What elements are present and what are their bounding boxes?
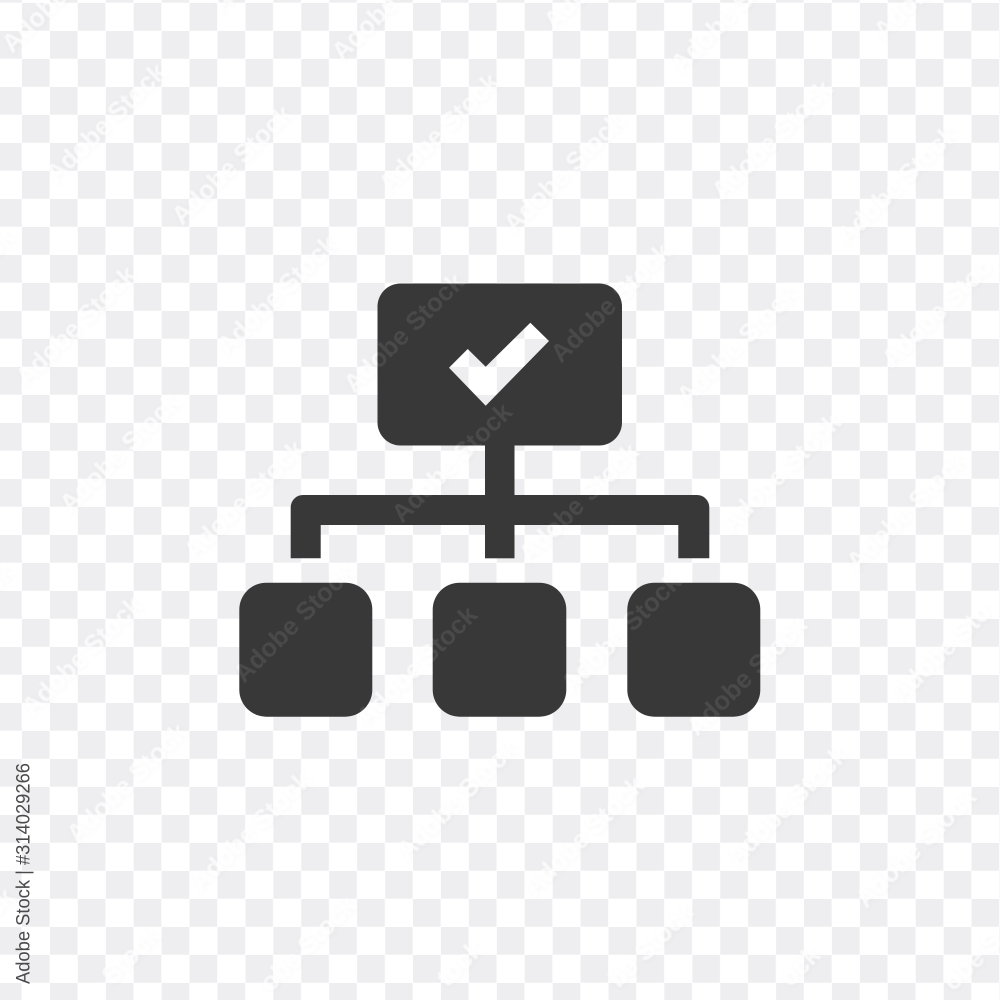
- watermark layer: repeated Adobe Stock text: Stock: [96, 920, 166, 990]
- watermark layer: repeated Adobe Stock text: Adobe Stock: [62, 717, 193, 848]
- watermark layer: repeated Adobe Stock text: Adobe Stock: [722, 740, 853, 871]
- watermark overlay on the dark icon: Adobe Stock: [546, 237, 677, 368]
- watermark layer: repeated Adobe Stock text: Adobe Stock: [387, 397, 518, 528]
- watermark layer: repeated Adobe Stock text: Adobe Stock: [229, 557, 360, 688]
- watermark layer: repeated Adobe Stock text: Adobe Stock: [842, 445, 973, 576]
- watermark layer: repeated Adobe Stock text: Adobe Stock: [186, 765, 317, 896]
- connector stem: [485, 445, 514, 558]
- watermark layer: repeated Adobe Stock text: Adobe Stock: [682, 610, 813, 741]
- watermark layer: repeated Adobe Stock text: Adobe Stock: [212, 229, 343, 360]
- watermark layer: repeated Adobe Stock text: Adobe Stock: [17, 590, 148, 721]
- middle child box: [433, 583, 566, 717]
- watermark layer: repeated Adobe Stock text: Adobe Stock: [499, 107, 630, 238]
- watermark layer: repeated Adobe Stock text: Adobe Stock: [519, 770, 650, 901]
- watermark layer: repeated Adobe Stock text: tock: [432, 935, 489, 992]
- watermark overlay on the dark icon: Adobe Stock: [556, 567, 687, 698]
- watermark layer: repeated Adobe Stock text: Adobe Stock: [672, 279, 803, 410]
- left child box: [239, 583, 372, 717]
- watermark layer: repeated Adobe Stock text: ock: [775, 940, 826, 992]
- icon: hierarchy chart with check mark: [239, 284, 760, 717]
- watermark layer: repeated Adobe Stock text: Adobe Stock: [179, 434, 310, 565]
- watermark layer: repeated Adobe Stock text: Adobe Stock: [374, 67, 505, 198]
- watermark layer: repeated Adobe Stock text: obe Stock: [255, 890, 362, 997]
- watermark layer: repeated Adobe Stock text: Adobe Stock: [556, 567, 687, 698]
- watermark overlay on the dark icon: [240, 284, 760, 716]
- watermark overlay on the dark icon: Adobe Stock: [387, 397, 518, 528]
- watermark layer: repeated Adobe Stock text: Adobe Stock: [514, 437, 645, 568]
- watermark layer: repeated Adobe Stock text: be Stock: [603, 897, 699, 993]
- watermark layer: repeated Adobe Stock text: Adobe Stock: [11, 260, 142, 391]
- connector bar with side drops: [291, 495, 709, 558]
- watermark overlay on the dark icon: Adobe Stock: [229, 557, 360, 688]
- watermark layer: repeated Adobe Stock text: Adobe Stock: [832, 119, 963, 250]
- watermark overlay on the dark icon: Adobe Stock: [352, 600, 483, 731]
- stock credit text, vertical at bottom left: Adobe Stock | #314029266: [14, 763, 34, 984]
- watermark layer: repeated Adobe Stock text: Adobe Stock: [352, 600, 483, 731]
- watermark overlay on the dark icon: Adobe Stock: [339, 267, 470, 398]
- watermark layer: repeated Adobe Stock text: Adobe Stock: [41, 57, 172, 188]
- right child box: [627, 583, 760, 717]
- watermark layer: repeated Adobe Stock text: Adobe Stock: [851, 782, 982, 913]
- watermark layer: repeated Adobe Stock text: Adobe Stock: [167, 99, 298, 230]
- watermark layer: repeated Adobe Stock text: Adobe Stock: [716, 407, 847, 538]
- top box with check mark cut-out: [378, 284, 622, 446]
- watermark overlay on the dark icon: Adobe Stock: [514, 437, 645, 568]
- watermark layer: repeated Adobe Stock text: Adobe Sto: [886, 598, 997, 708]
- watermark layer: repeated Adobe Stock text: Adobe Stock: [546, 237, 677, 368]
- watermark overlay on the dark icon: Adobe Stock: [682, 610, 813, 741]
- watermark layer: repeated Adobe Stock text: Adobe Stock: [55, 387, 186, 518]
- watermark layer: repeated Adobe Stock text: Adobe Stock: [339, 267, 470, 398]
- watermark layer: repeated Adobe Stock text: Adobe Stock: [392, 734, 523, 865]
- watermark layer: repeated Adobe Stock text: Adobe Stock: [707, 74, 838, 205]
- watermark layer: repeated Adobe Stock text: Adobe Stoc: [877, 253, 998, 373]
